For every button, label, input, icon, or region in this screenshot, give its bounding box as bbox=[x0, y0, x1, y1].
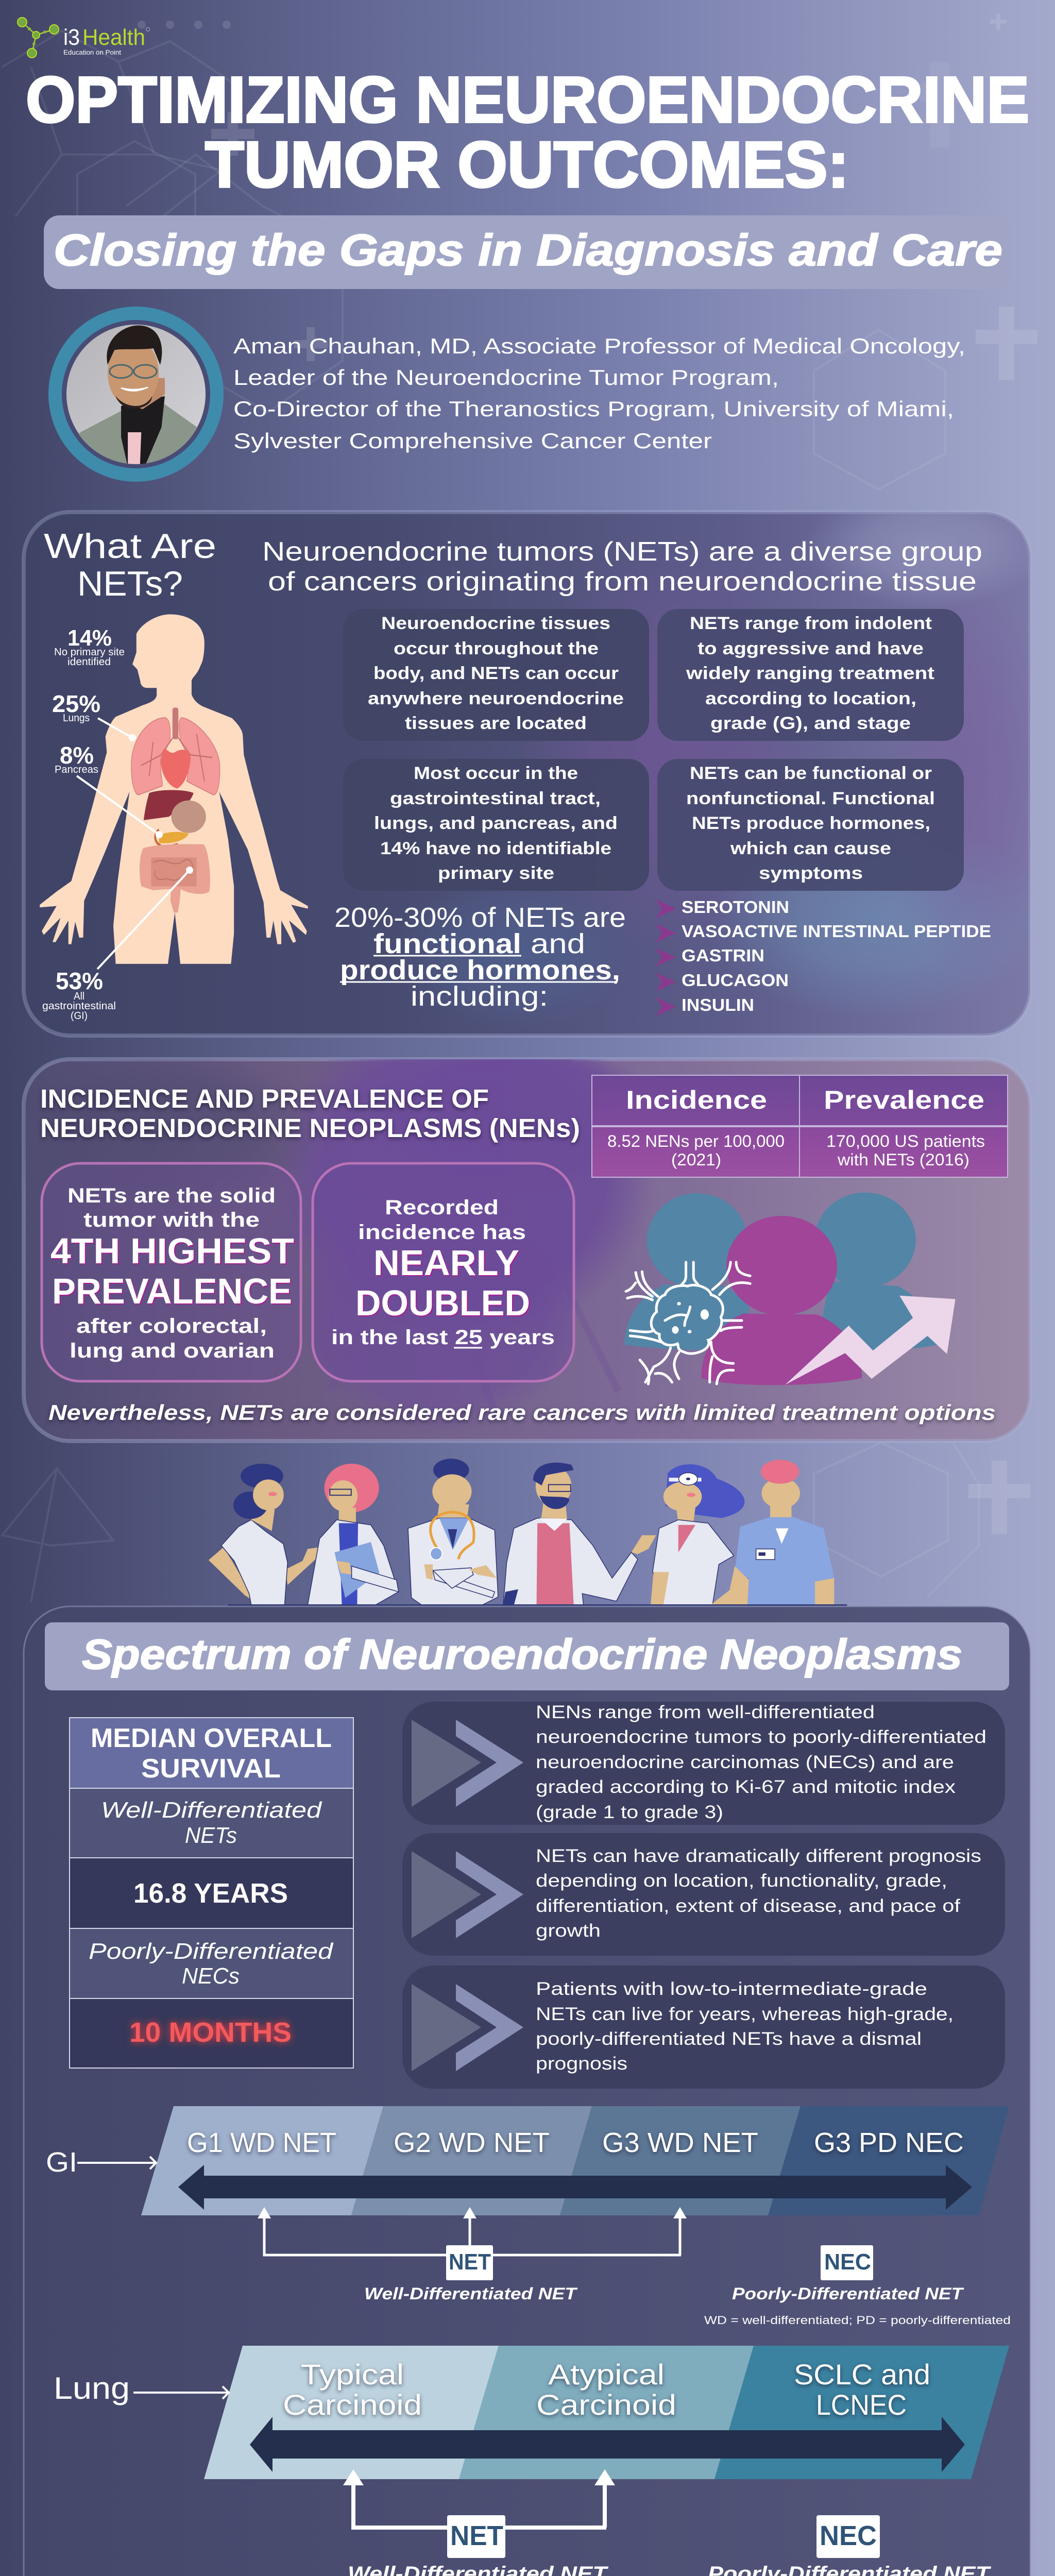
chart: lung spectrum bbox=[54, 2346, 1009, 2576]
title: TUMOR OUTCOMES: bbox=[205, 128, 849, 201]
info row: spectrum definition: (grade 1 to grade 3) bbox=[536, 1802, 723, 1822]
info row: prognosis factors: differentiation, extent of disease, and pace of bbox=[536, 1896, 960, 1916]
body diagram with organs bbox=[40, 614, 308, 964]
callout: nearly doubled: in the last 25 years bbox=[331, 1326, 555, 1349]
chart: GI grading spectrum: G1 WD NET bbox=[187, 2127, 336, 2158]
info row: outcome by grade: NETs can live for years, whereas high-grade, bbox=[536, 2004, 954, 2024]
info box: functional bbox=[657, 759, 964, 891]
speaker credentials: Co-Director of the Theranostics Program, University of Miami, bbox=[233, 397, 954, 421]
lung label and arrow: Lung bbox=[54, 2371, 130, 2405]
stomach bbox=[171, 801, 206, 833]
functional NETs statement bbox=[334, 902, 626, 1012]
info box: functional: NETs produce hormones, bbox=[692, 814, 930, 833]
callout: 4th highest prevalence bbox=[42, 1163, 301, 1381]
info box: range: according to location, bbox=[705, 689, 916, 708]
functional NETs statement: produce hormones, bbox=[340, 955, 620, 986]
icon: patients, neuron and rising arrow bbox=[624, 1193, 956, 1385]
chart: GI grading spectrum: Poorly-Differentiated NET bbox=[732, 2284, 964, 2303]
info row: outcome by grade: poorly-differentiated NETs have a dismal bbox=[536, 2029, 922, 2049]
info row: prognosis factors: NETs can have dramatically different prognosis bbox=[536, 1846, 981, 1866]
info row: outcome by grade bbox=[402, 1965, 1005, 2089]
info box: tissues: Neuroendocrine tissues bbox=[381, 614, 610, 633]
illustration: healthcare team bbox=[209, 1459, 847, 1607]
functional NETs statement: functional bbox=[373, 928, 521, 959]
info box: tissues: occur throughout the bbox=[394, 639, 599, 658]
chart: lung spectrum: LCNEC bbox=[816, 2388, 907, 2421]
chart: lung spectrum: Typical bbox=[301, 2358, 404, 2391]
speaker credentials: Aman Chauhan, MD, Associate Professor of Medical Oncology, bbox=[233, 334, 965, 358]
info row: outcome by grade: Patients with low-to-intermediate-grade bbox=[536, 1979, 927, 1999]
portrait bbox=[48, 307, 224, 482]
info box: functional: NETs can be functional or bbox=[690, 764, 932, 783]
hormone list: GASTRIN bbox=[682, 946, 764, 965]
speaker credentials bbox=[233, 334, 965, 453]
doctor 5 bbox=[651, 1464, 744, 1605]
info row: spectrum definition bbox=[402, 1702, 1005, 1825]
hormone list: VASOACTIVE INTESTINAL PEPTIDE bbox=[682, 922, 991, 941]
table: incidence and prevalence: 8.52 NENs per 100,000 bbox=[607, 1132, 785, 1150]
table: median overall survival bbox=[70, 1718, 353, 2068]
chart: GI grading spectrum: G3 WD NET bbox=[602, 2127, 758, 2158]
logo: i3Health: Education on Point bbox=[63, 48, 121, 56]
speaker credentials: Leader of the Neuroendocrine Tumor Program, bbox=[233, 365, 779, 389]
info box: tissues bbox=[343, 609, 649, 741]
chart: lung spectrum: SCLC and bbox=[794, 2358, 930, 2391]
rare cancers statement: Nevertheless, NETs are considered rare cancers with limited treatment options bbox=[48, 1400, 996, 1425]
doctor 6 bbox=[710, 1460, 834, 1605]
info box: functional: nonfunctional. Functional bbox=[686, 789, 935, 808]
table: median overall survival: 10 MONTHS bbox=[129, 2017, 292, 2048]
heading: incidence and prevalence bbox=[40, 1084, 580, 1143]
callout: 4th highest prevalence: after colorectal, bbox=[76, 1315, 267, 1337]
info box: sites: 14% have no identifiable bbox=[380, 839, 611, 858]
headline definition bbox=[262, 537, 982, 597]
NEC badge bbox=[816, 2515, 880, 2558]
spectrum banner: Spectrum of Neuroendocrine Neoplasms bbox=[82, 1631, 962, 1678]
info box: range: to aggressive and have bbox=[697, 639, 924, 658]
info row: outcome by grade: prognosis bbox=[536, 2054, 627, 2074]
info row: spectrum definition: neuroendocrine tumors to poorly-differentiated bbox=[536, 1727, 986, 1747]
speaker credentials: Sylvester Comprehensive Cancer Center bbox=[233, 429, 712, 453]
NEC badge: NEC bbox=[824, 2249, 871, 2275]
table: incidence and prevalence: with NETs (2016) bbox=[837, 1150, 969, 1169]
NET bracket arrows bbox=[343, 2469, 615, 2528]
GI label and arrow bbox=[46, 2147, 156, 2178]
info box: sites: lungs, and pancreas, and bbox=[374, 814, 618, 833]
chart: GI grading spectrum: Well-Differentiated NET bbox=[364, 2284, 578, 2303]
headline definition: of cancers originating from neuroendocrine tissue bbox=[268, 567, 977, 597]
site statistics: (GI) bbox=[71, 1010, 88, 1022]
subtitle banner bbox=[44, 215, 1011, 289]
heading: what are NETs: What Are bbox=[44, 527, 216, 566]
site statistics bbox=[42, 625, 125, 1022]
NET badge bbox=[447, 2515, 505, 2558]
heading: incidence and prevalence: NEUROENDOCRINE NEOPLASMS (NENs) bbox=[40, 1113, 580, 1143]
doctor 3 bbox=[408, 1459, 498, 1605]
info box: tissues: anywhere neuroendocrine bbox=[368, 689, 624, 708]
callout: nearly doubled: Recorded bbox=[385, 1196, 499, 1219]
info row: prognosis factors: depending on location, functionality, grade, bbox=[536, 1871, 947, 1891]
callout lines to organs bbox=[77, 718, 193, 969]
NEC badge bbox=[821, 2245, 873, 2280]
hormone list: INSULIN bbox=[682, 995, 754, 1014]
info box: sites: Most occur in the bbox=[414, 764, 578, 783]
chart: GI grading spectrum: WD = well-differentiated; PD = poorly-differentiated bbox=[704, 2314, 1011, 2327]
table: median overall survival: Well-Differentiated bbox=[101, 1798, 322, 1823]
chart: GI grading spectrum: G2 WD NET bbox=[394, 2127, 550, 2158]
NET badge: NET bbox=[449, 2249, 491, 2275]
logo: i3Health bbox=[18, 18, 149, 58]
site statistics: 14% bbox=[67, 625, 112, 651]
info box: tissues: body, and NETs can occur bbox=[373, 664, 619, 683]
callout: nearly doubled: incidence has bbox=[358, 1221, 526, 1244]
info row: spectrum definition: neuroendocrine carcinomas (NECs) and are bbox=[536, 1752, 954, 1772]
site statistics: All bbox=[74, 991, 84, 1002]
table: incidence and prevalence: Incidence bbox=[626, 1086, 767, 1114]
lungs bbox=[131, 718, 220, 795]
chart: lung spectrum: Atypical bbox=[548, 2358, 665, 2391]
heading: what are NETs bbox=[44, 527, 216, 603]
info box: functional: symptoms bbox=[759, 863, 863, 883]
functional NETs statement: and bbox=[531, 928, 585, 959]
info box: functional: which can cause bbox=[730, 839, 891, 858]
info box: sites: gastrointestinal tract, bbox=[390, 789, 601, 808]
table: median overall survival: Poorly-Differentiated bbox=[89, 1939, 334, 1964]
info box: range: NETs range from indolent bbox=[690, 614, 932, 633]
NET badge: NET bbox=[450, 2520, 503, 2551]
icon: chevron bbox=[412, 1851, 481, 1938]
panel: spectrum of neuroendocrine neoplasms bbox=[24, 1606, 1030, 2576]
site statistics: 25% bbox=[52, 690, 100, 717]
spectrum banner bbox=[45, 1622, 1009, 1690]
liver bbox=[144, 790, 194, 820]
pancreas bbox=[159, 832, 189, 843]
logo: i3Health: Health bbox=[82, 25, 145, 50]
intestine bbox=[140, 844, 210, 912]
callout: 4th highest prevalence: lung and ovarian bbox=[70, 1340, 275, 1362]
table: incidence and prevalence bbox=[592, 1075, 1008, 1177]
icon: chevron bbox=[412, 1984, 481, 2071]
title: OPTIMIZING NEUROENDOCRINE bbox=[26, 63, 1029, 136]
table: incidence and prevalence: 170,000 US patients bbox=[826, 1132, 985, 1150]
logo: i3Health: i3 bbox=[63, 25, 80, 50]
floor line bbox=[228, 1604, 847, 1606]
headline definition: Neuroendocrine tumors (NETs) are a diverse group bbox=[262, 537, 982, 567]
double arrow bbox=[250, 2417, 965, 2472]
heading: incidence and prevalence: INCIDENCE AND PREVALENCE OF bbox=[40, 1084, 489, 1113]
site statistics: Pancreas bbox=[55, 764, 98, 775]
hormone list bbox=[656, 897, 991, 1016]
heart bbox=[161, 749, 191, 789]
panel: incidence and prevalence bbox=[22, 1057, 1030, 1443]
NET bracket arrows bbox=[258, 2207, 687, 2255]
info row: prognosis factors: growth bbox=[536, 1921, 601, 1941]
callout: 4th highest prevalence: PREVALENCE bbox=[52, 1271, 292, 1311]
icon: chevron bbox=[412, 1720, 481, 1807]
site statistics: 53% bbox=[56, 968, 103, 994]
chart: GI grading spectrum bbox=[46, 2106, 1011, 2327]
chart: lung spectrum: Carcinoid bbox=[536, 2388, 676, 2421]
double arrow bbox=[178, 2165, 972, 2210]
hormone list: SEROTONIN bbox=[682, 897, 789, 917]
callout: nearly doubled: DOUBLED bbox=[355, 1283, 530, 1323]
info box: sites bbox=[343, 759, 649, 891]
info row: spectrum definition: graded according to Ki-67 and mitotic index bbox=[536, 1777, 956, 1797]
NEC badge: NEC bbox=[820, 2520, 877, 2551]
panel: what are NETs bbox=[24, 484, 1051, 1036]
table: median overall survival: NECs bbox=[182, 1963, 240, 1989]
heading: what are NETs: NETs? bbox=[77, 564, 183, 603]
info box: range: grade (G), and stage bbox=[710, 714, 911, 733]
title bbox=[26, 63, 1029, 201]
callout: 4th highest prevalence: NETs are the solid bbox=[67, 1184, 276, 1207]
table: median overall survival: MEDIAN OVERALL bbox=[91, 1723, 332, 1753]
site statistics: 8% bbox=[60, 742, 94, 769]
GI label and arrow: GI bbox=[46, 2147, 77, 2178]
info box: range bbox=[657, 609, 964, 741]
functional NETs statement: including: bbox=[411, 981, 548, 1012]
chart: lung spectrum: Carcinoid bbox=[283, 2388, 422, 2421]
table: median overall survival: NETs bbox=[185, 1823, 237, 1848]
hormone list: GLUCAGON bbox=[682, 971, 789, 990]
callout: nearly doubled bbox=[313, 1163, 574, 1381]
info box: tissues: tissues are located bbox=[405, 714, 587, 733]
site statistics: identified bbox=[67, 656, 111, 668]
table: median overall survival: 16.8 YEARS bbox=[133, 1878, 288, 1909]
doctor 2 bbox=[308, 1464, 399, 1605]
chart: GI grading spectrum: G3 PD NEC bbox=[814, 2127, 964, 2158]
NET badge bbox=[446, 2245, 493, 2280]
info row: prognosis factors bbox=[402, 1833, 1005, 1956]
site statistics: Lungs bbox=[63, 713, 90, 724]
doctor 4 bbox=[503, 1463, 656, 1607]
info box: sites: primary site bbox=[438, 863, 554, 883]
table: incidence and prevalence: (2021) bbox=[671, 1150, 721, 1169]
site statistics: gastrointestinal bbox=[42, 1001, 116, 1012]
info box: range: widely ranging treatment bbox=[686, 664, 934, 683]
subtitle banner: Closing the Gaps in Diagnosis and Care bbox=[54, 226, 1002, 275]
table: incidence and prevalence: Prevalence bbox=[824, 1086, 984, 1114]
lung label and arrow bbox=[54, 2371, 229, 2405]
doctor 1 bbox=[209, 1464, 319, 1605]
table: median overall survival: SURVIVAL bbox=[141, 1754, 281, 1784]
site statistics: No primary site bbox=[54, 647, 125, 658]
info row: spectrum definition: NENs range from well-differentiated bbox=[536, 1702, 875, 1722]
functional NETs statement: 20%-30% of NETs are bbox=[334, 902, 626, 933]
callout: 4th highest prevalence: tumor with the bbox=[83, 1209, 260, 1231]
callout: 4th highest prevalence: 4TH HIGHEST bbox=[50, 1231, 294, 1271]
callout: nearly doubled: NEARLY bbox=[373, 1243, 519, 1283]
